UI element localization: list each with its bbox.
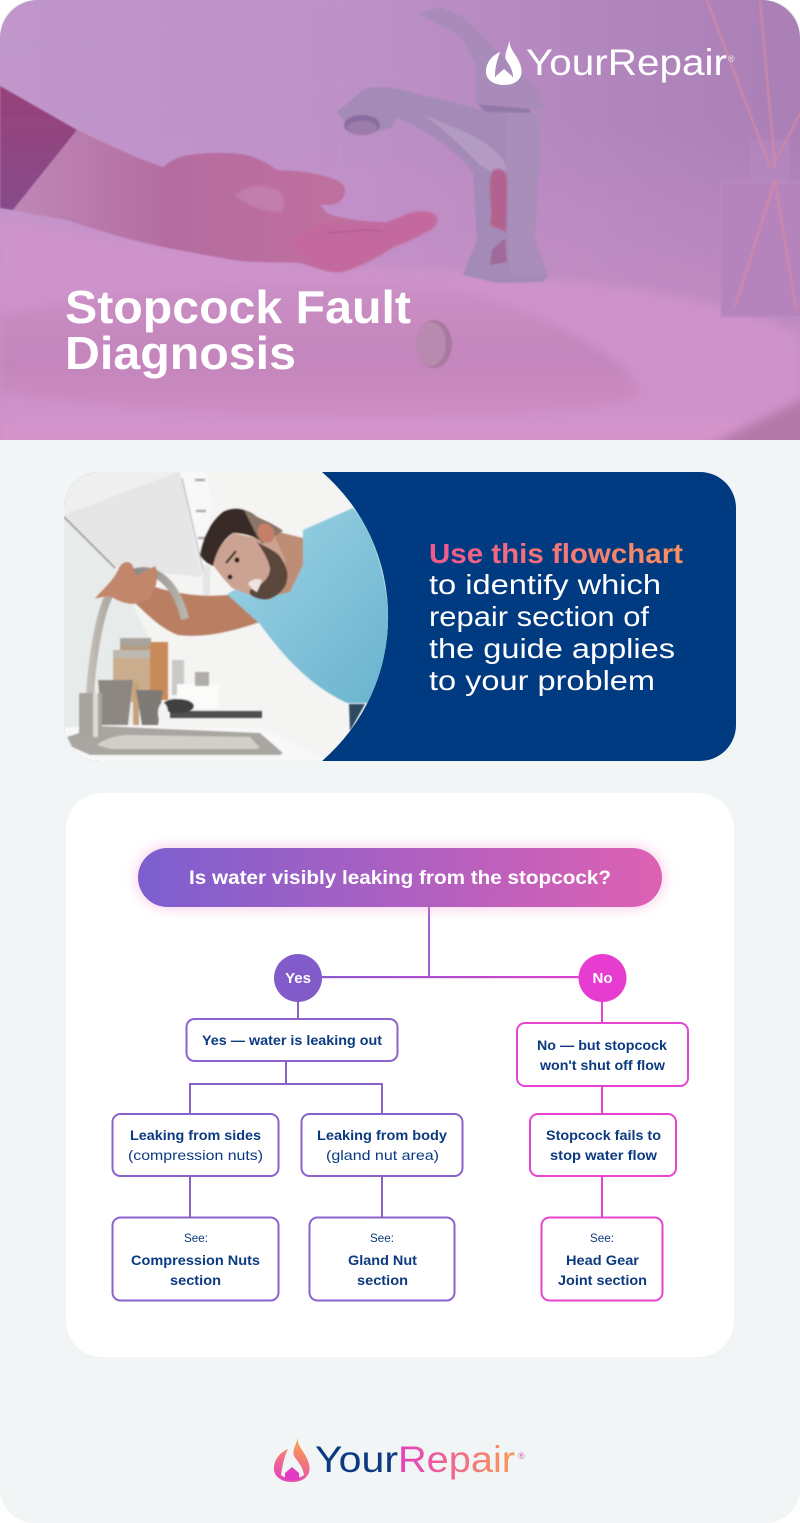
intro text: to identify which xyxy=(429,569,661,600)
box: leaking from sides xyxy=(112,1114,278,1176)
hair xyxy=(200,509,283,566)
box: gland nut section: See: xyxy=(370,1231,394,1245)
intro text: Use this flowchart xyxy=(429,538,683,569)
forearm xyxy=(135,587,260,636)
box: no but won't shut off: won't shut off flow xyxy=(539,1057,665,1073)
logo: white: ® xyxy=(728,54,735,64)
icon: faucet xyxy=(337,7,548,283)
box: no but won't shut off: No — but stopcock xyxy=(537,1037,667,1053)
logo: footer: ® xyxy=(518,1451,525,1461)
t-shirt xyxy=(227,508,395,703)
hand on tap xyxy=(95,562,157,604)
no node xyxy=(578,954,626,1002)
box: stopcock fails: stop water flow xyxy=(550,1147,657,1163)
icon: drain plug xyxy=(416,320,452,368)
hero title xyxy=(65,281,411,379)
logo: footer: Your xyxy=(315,1439,398,1480)
box: compression nuts section: section xyxy=(170,1272,221,1288)
logo: footer: Repair xyxy=(398,1439,515,1480)
box: leaking from sides: Leaking from sides xyxy=(130,1127,261,1143)
box: head gear joint section: Joint section xyxy=(558,1272,647,1288)
photo: man inspecting tap xyxy=(64,472,395,761)
box: head gear joint section xyxy=(542,1218,662,1300)
cups xyxy=(98,680,133,725)
jeans xyxy=(349,704,365,731)
mouth and eyes xyxy=(226,551,262,592)
intro text xyxy=(429,538,683,696)
logo: white: YourRepair xyxy=(526,42,727,83)
jars and utensils xyxy=(119,645,152,651)
box: gland nut section: Gland Nut xyxy=(348,1252,417,1268)
box: leaking from body xyxy=(302,1114,462,1176)
box: head gear joint section: See: xyxy=(590,1231,614,1245)
box: yes leaking: Yes — water is leaking out xyxy=(202,1032,382,1048)
neck xyxy=(274,532,304,596)
box: gland nut section: section xyxy=(357,1272,408,1288)
icon: hand and sleeve xyxy=(0,86,437,272)
box: compression nuts section: See: xyxy=(184,1231,208,1245)
box: stopcock fails xyxy=(530,1114,676,1176)
intro text: the guide applies xyxy=(429,633,675,664)
no node: No xyxy=(592,970,612,987)
box: leaking from sides: (compression nuts) xyxy=(128,1147,263,1163)
cabinet xyxy=(64,517,150,735)
sink xyxy=(0,218,800,450)
box: head gear joint section: Head Gear xyxy=(566,1252,640,1268)
panel: flowchart xyxy=(66,793,734,1357)
box: compression nuts section xyxy=(112,1218,278,1300)
diffuser xyxy=(707,0,800,317)
question pill xyxy=(138,848,662,907)
intro text: repair section of xyxy=(429,601,649,632)
hero title: Stopcock Fault xyxy=(65,281,411,333)
sink xyxy=(67,726,283,755)
connectors: no branch xyxy=(601,1001,603,1217)
box: gland nut section xyxy=(310,1218,454,1300)
box: no but won't shut off xyxy=(517,1023,688,1086)
box: yes leaking xyxy=(186,1019,398,1061)
logo: footer xyxy=(274,1437,525,1482)
wall tile lines xyxy=(0,0,600,290)
counter xyxy=(64,727,330,761)
yes node xyxy=(274,954,322,1002)
panel: intro xyxy=(64,472,736,761)
ear xyxy=(256,522,275,543)
box: leaking from body: Leaking from body xyxy=(317,1127,447,1143)
yes node: Yes xyxy=(285,970,311,987)
connector: question to branches xyxy=(298,907,602,978)
intro text: to your problem xyxy=(429,665,655,696)
panel: hero photo xyxy=(0,0,800,450)
head xyxy=(213,530,288,600)
hero title: Diagnosis xyxy=(65,327,296,379)
box: compression nuts section: Compression Nuts xyxy=(131,1252,260,1268)
box: stopcock fails: Stopcock fails to xyxy=(546,1127,661,1143)
connectors: yes branch xyxy=(190,1001,382,1217)
question pill: Is water visibly leaking from the stopcock? xyxy=(189,868,611,889)
beard xyxy=(249,542,288,600)
logo: white xyxy=(486,40,735,85)
tap xyxy=(90,571,185,695)
box: leaking from body: (gland nut area) xyxy=(326,1147,439,1163)
